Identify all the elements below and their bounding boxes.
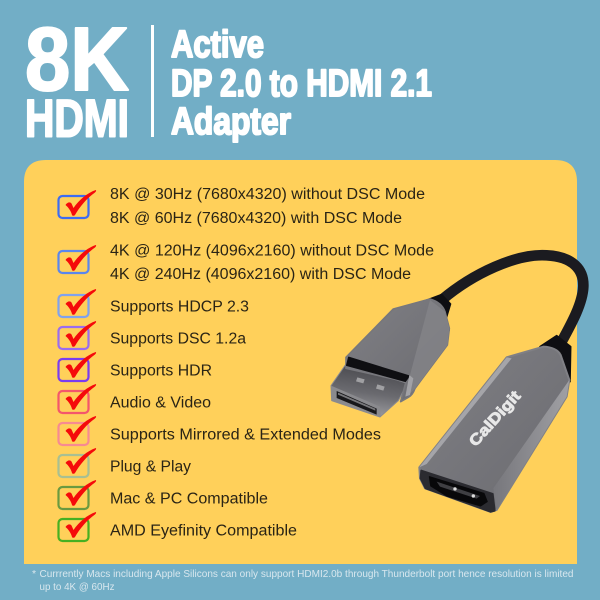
HDMI strain relief (540, 336, 571, 382)
feature list text: Plug & Play (110, 458, 191, 476)
HDMI port (421, 471, 495, 512)
HDMI shell (419, 347, 569, 512)
feature list text: Supports HDCP 2.3 (110, 298, 249, 316)
cable (442, 255, 583, 342)
DP plug metal (331, 364, 407, 417)
feature list text: Supports DSC 1.2a (110, 330, 246, 348)
checkbox icons (58, 190, 96, 541)
heading: product name: DP 2.0 to HDMI 2.1 (171, 63, 432, 105)
product image: adapter (331, 255, 583, 512)
feature list text: 4K @ 120Hz (4096x2160) without DSC Mode (110, 242, 434, 260)
feature list text: AMD Eyefinity Compatible (110, 522, 297, 540)
feature list text (110, 186, 434, 540)
feature list text: Mac & PC Compatible (110, 490, 268, 508)
feature list text: Audio & Video (110, 394, 211, 412)
heading: product name: Active (171, 24, 264, 66)
vertical divider (151, 25, 154, 137)
DP strain relief (425, 294, 451, 330)
title: HDMI: HDMI (25, 90, 129, 148)
feature list text: 8K @ 60Hz (7680x4320) with DSC Mode (110, 210, 402, 227)
heading: product name (171, 24, 432, 143)
DP shell (346, 299, 449, 402)
feature list text: Supports HDR (110, 362, 212, 380)
footnote: Currrently Macs including Apple Silicons can only support HDMI2.0b through Thunderbolt port hence resolution is limited (40, 568, 574, 580)
footnote (32, 568, 574, 593)
heading: product name: Adapter (171, 101, 291, 143)
panel: features (24, 160, 577, 564)
footnote: up to 4K @ 60Hz (40, 581, 114, 593)
footnote: * (32, 568, 36, 580)
feature list text: 8K @ 30Hz (7680x4320) without DSC Mode (110, 186, 425, 203)
logo: CalDigit (466, 388, 524, 450)
feature list text: Supports Mirrored & Extended Modes (110, 426, 381, 444)
title: 8K: 8K (25, 10, 129, 110)
feature list text: 4K @ 240Hz (4096x2160) with DSC Mode (110, 266, 411, 283)
